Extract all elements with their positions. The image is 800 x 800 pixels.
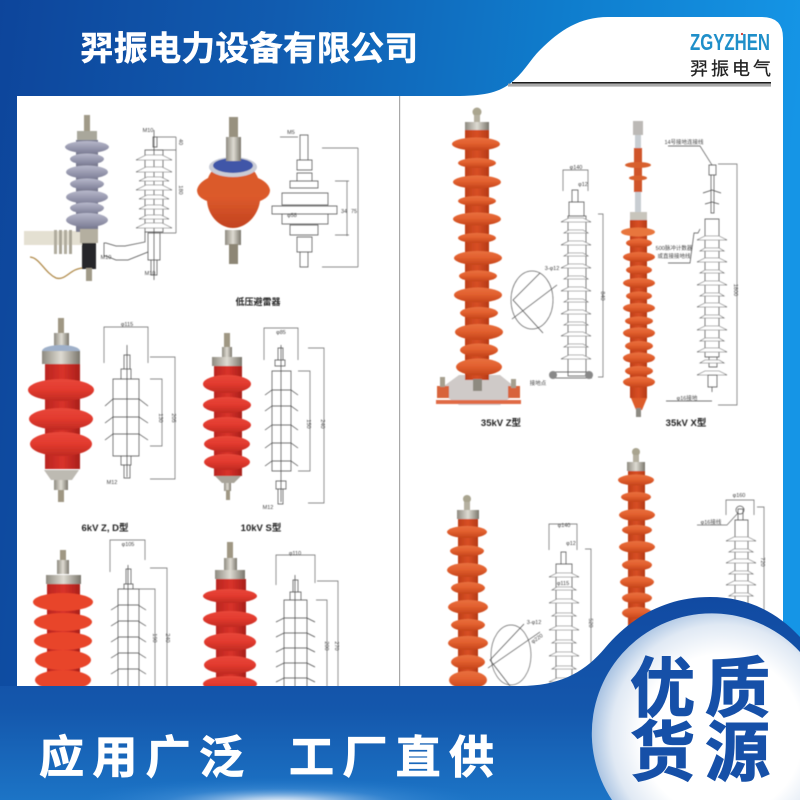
badge text: 质	[705, 636, 770, 730]
diagram: 6kV dimensions	[104, 322, 176, 486]
diagram: 35kV Z dimensions	[511, 165, 605, 387]
photo: 35kV X arrester	[621, 121, 655, 417]
photo: lower-left red arrester	[33, 550, 93, 690]
diagram: 10kV dimensions: M12	[263, 505, 273, 511]
photo: lower 35kV arrester right	[618, 448, 655, 631]
diagram: 35kV Z dimensions: φ12	[578, 182, 588, 188]
diagram: gray arrester dimensions: M10	[101, 255, 111, 261]
slogan right: 工厂直供	[289, 721, 494, 786]
photo: gray polymer arrester	[24, 115, 109, 281]
caption: 10kV S: 10kV S型	[241, 522, 282, 534]
logo red accent	[741, 33, 743, 35]
diagram: 35kV X dimensions: 或直接接地线	[657, 252, 691, 260]
diagram: 10kV dimensions: 240	[319, 419, 325, 429]
logo text: brand name: 羿振电气	[690, 55, 771, 81]
diagram: gray arrester dimensions	[101, 128, 183, 280]
white content panel	[17, 96, 783, 686]
diagram: round arrester dimensions: 75	[351, 209, 357, 215]
diagram: 35kV X dimensions: φ16接地	[677, 394, 698, 402]
diagram: lower 35kV left dimensions: 3-φ12	[527, 620, 541, 626]
logo panel	[455, 17, 783, 96]
badge text: 货	[630, 700, 695, 794]
diagram: 6kV dimensions: M12	[107, 480, 117, 486]
bottom glow	[90, 755, 470, 800]
diagram: 35kV X dimensions: 1800	[732, 284, 738, 296]
diagram: 6kV dimensions: 130	[157, 413, 163, 423]
diagram: 6kV dimensions: 205	[170, 413, 176, 423]
badge text: 源	[705, 700, 770, 794]
diagram: 35kV X dimensions: 14号接地连接线	[664, 138, 704, 146]
diagram: lower-left dimensions: 190	[151, 633, 157, 643]
diagram: round arrester dimensions: 34	[341, 209, 347, 215]
photo: round low-voltage arrester	[197, 117, 270, 264]
photo: 10kV arrester	[203, 333, 251, 500]
diagram: 35kV Z dimensions: 接地点	[530, 379, 547, 387]
diagram: 10kV dimensions	[263, 328, 325, 511]
diagram: lower 35kV left dimensions: 520	[587, 618, 593, 628]
photo: lower-right red arrester	[203, 542, 257, 692]
diagram: lower 35kV left dimensions: φ220	[530, 633, 544, 645]
diagram: round arrester dimensions: φ58	[287, 213, 297, 219]
diagram: lower 35kV right dimensions	[697, 493, 765, 620]
circle badge	[592, 613, 800, 800]
caption: 6kV Z, D: 6kV Z, D型	[82, 522, 129, 534]
photo: lower 35kV arrester left	[447, 495, 488, 689]
diagram: gray arrester dimensions: M10	[145, 271, 155, 277]
diagram: round arrester dimensions: M5	[287, 130, 295, 136]
diagram: lower 35kV left dimensions: φ115	[557, 581, 569, 587]
diagram: 10kV dimensions: φ85	[276, 330, 286, 336]
diagram: lower-right dimensions: φ110	[289, 551, 301, 557]
caption: 35kV X: 35kV X型	[666, 417, 707, 429]
diagram: lower-right dimensions: 270	[333, 641, 339, 651]
diagram: gray arrester dimensions: 180	[177, 185, 183, 195]
diagram: gray arrester dimensions: 40	[177, 139, 183, 145]
diagram: 35kV Z dimensions: φ140	[570, 165, 582, 171]
slogan left: 应用广泛	[39, 721, 244, 786]
diagram: lower-right dimensions	[276, 551, 339, 690]
logo underline	[508, 82, 771, 87]
diagram: 10kV dimensions: 150	[305, 419, 311, 429]
diagram: lower 35kV right dimensions: 720	[759, 557, 765, 567]
diagram: lower 35kV right dimensions: φ16接线	[701, 518, 722, 526]
badge text: 优	[630, 636, 695, 730]
diagram: 35kV X dimensions	[656, 138, 738, 405]
diagram: lower 35kV left dimensions: φ12	[566, 541, 576, 547]
diagram: lower 35kV right dimensions: φ160	[733, 493, 745, 499]
diagram: lower-left dimensions: φ105	[122, 542, 134, 548]
panel contents: product catalogue	[24, 96, 765, 692]
logo text: ZGYZHEN: ZGYZHEN	[690, 29, 770, 55]
diagram: round arrester dimensions	[272, 130, 358, 267]
diagram: lower 35kV left dimensions: φ140	[558, 523, 570, 529]
bottom wave band	[0, 597, 800, 800]
diagram: 35kV X dimensions: 500脉冲计数器	[656, 244, 693, 252]
diagram: lower-right dimensions: 200	[323, 641, 329, 651]
diagram: lower-left dimensions	[110, 540, 170, 690]
column divider	[399, 96, 400, 686]
diagram: 35kV Z dimensions: 840	[599, 291, 605, 301]
diagram: gray arrester dimensions: M10	[143, 128, 153, 134]
badge text	[630, 636, 770, 794]
caption: 35kV Z: 35kV Z型	[481, 417, 522, 429]
diagram: lower 35kV left dimensions	[488, 523, 593, 690]
title: company name: 羿振电力设备有限公司	[80, 21, 418, 70]
photo: 6kV arrester	[28, 318, 94, 502]
diagram: 35kV Z dimensions: 3-φ12	[545, 266, 559, 272]
caption: low voltage arrester: 低压避雷器	[235, 295, 281, 308]
photo: 35kV Z arrester	[436, 108, 521, 405]
diagram: 6kV dimensions: φ115	[121, 322, 133, 328]
diagram: lower-left dimensions: 240	[164, 633, 170, 643]
